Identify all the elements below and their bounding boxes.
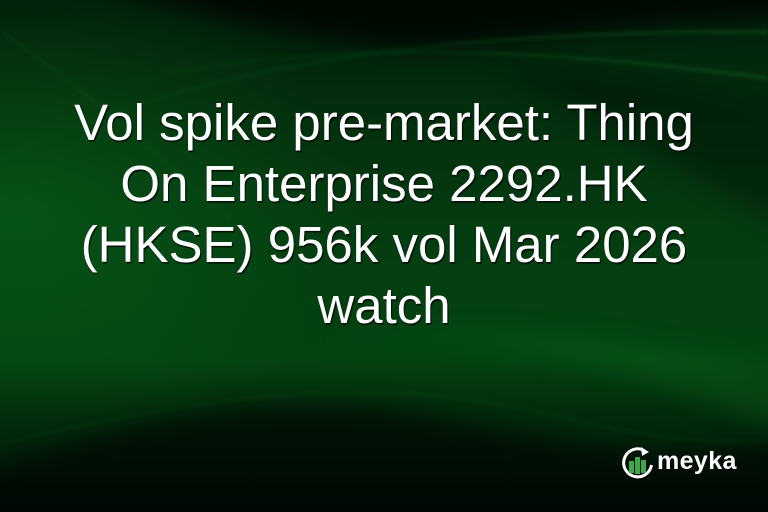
wordmark: meyka — [657, 447, 737, 475]
title: On Enterprise 2292.HK — [120, 155, 648, 212]
icon: circular arrow with bars — [622, 447, 653, 478]
title — [74, 94, 694, 334]
title: (HKSE) 956k vol Mar 2026 — [81, 216, 687, 273]
title: watch — [317, 277, 451, 334]
title: Vol spike pre-market: Thing — [74, 94, 694, 151]
logo: meyka — [622, 447, 737, 478]
